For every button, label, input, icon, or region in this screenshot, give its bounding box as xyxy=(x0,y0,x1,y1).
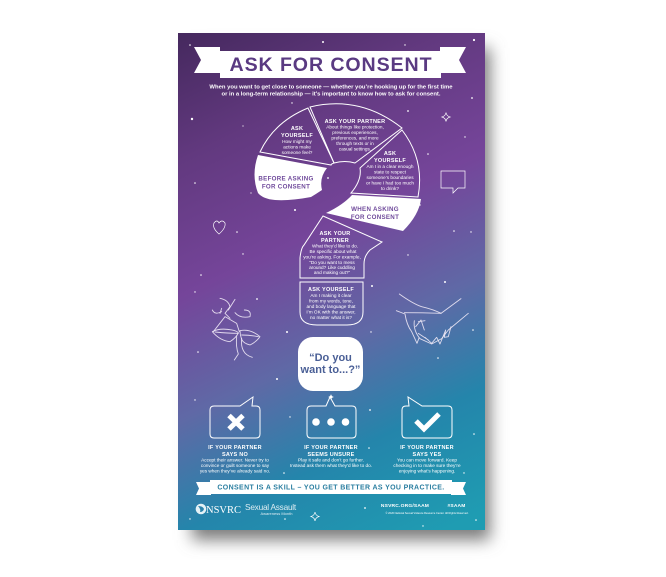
segment: ask yourself, left: someone feel? xyxy=(282,150,313,155)
website and hashtag: NSVRC.ORG/SAAM xyxy=(381,503,429,509)
response: seems unsure: Instead ask them what they’d like to do. xyxy=(290,463,372,468)
segment: ask yourself, right: to drink? xyxy=(381,186,399,191)
response: says no xyxy=(200,397,270,474)
logo: NSVRC: NSVRC xyxy=(206,505,241,516)
segment: ask yourself, bottom: ASK YOURSELF xyxy=(308,287,354,293)
response: says yes: enjoying what’s happening. xyxy=(399,468,455,474)
segment: ask your partner: casual settings. xyxy=(339,146,371,152)
decorative stars xyxy=(189,39,477,527)
poster shadow xyxy=(192,48,490,540)
segment: ask your partner, lower: Be specific about what xyxy=(310,249,357,254)
question mark diagram xyxy=(254,104,421,325)
intro text: or in a long-term relationship — it’s important to know how to ask for consent. xyxy=(221,91,441,97)
footer banner xyxy=(196,480,466,495)
segment: ask yourself, left: How might my xyxy=(282,139,312,144)
footer banner: CONSENT IS A SKILL – YOU GET BETTER AS YOU PRACTICE. xyxy=(217,485,445,492)
segment: before asking: BEFORE ASKING xyxy=(258,176,314,182)
segment: ask yourself, right: YOURSELF xyxy=(374,158,406,164)
response: says yes: You can move forward. Keep xyxy=(397,458,457,462)
website and hashtag: #SAAM xyxy=(447,503,466,509)
response: seems unsure xyxy=(290,397,372,468)
response: says yes xyxy=(393,397,461,474)
sparkle centre xyxy=(328,394,334,400)
website and hashtag: © 2020 National Sexual Violence Resource Center. All Rights Reserved. xyxy=(386,511,469,515)
response: seems unsure: Play it safe and don’t go further. xyxy=(298,458,364,462)
icon: bubble with check xyxy=(402,397,452,438)
response: says yes: SAYS YES xyxy=(413,452,442,458)
segment: ask yourself, bottom xyxy=(300,282,363,325)
speech bubble: do you want to: “Do you xyxy=(309,352,352,364)
speech bubble: do you want to: want to...?” xyxy=(300,364,360,376)
segment: ask your partner, lower: ASK YOUR xyxy=(320,231,350,237)
segment: ask yourself, right: Am I in a clear enough xyxy=(367,164,414,169)
segment: ask yourself, right: ASK xyxy=(384,151,396,157)
response: seems unsure: SEEMS UNSURE xyxy=(307,452,355,458)
response: says no: convince or guilt someone to say xyxy=(201,463,270,468)
response: says no: Accept their answer. Never try to xyxy=(201,458,269,462)
response: says no: SAYS NO xyxy=(222,452,248,458)
segment: before asking xyxy=(254,155,327,200)
segment: ask yourself, bottom: from my words, tone, xyxy=(309,298,353,304)
logo: Sexual Assault Awareness Month: Awareness Month xyxy=(261,511,292,516)
segment: ask yourself, bottom: and body language that xyxy=(306,304,356,309)
segment: ask your partner, lower: you’re asking. For example, xyxy=(303,254,361,260)
icon: kissing lips xyxy=(212,298,260,360)
segment: ask yourself, bottom: I’m OK with the answer, xyxy=(306,310,356,314)
segment: ask yourself, right xyxy=(351,130,420,197)
intro text xyxy=(209,84,453,97)
website and hashtag xyxy=(381,503,469,515)
response: says no: yes when they’ve already said no. xyxy=(200,468,270,474)
response: says no: IF YOUR PARTNER xyxy=(208,445,262,451)
segment: ask yourself, left: YOURSELF xyxy=(281,133,313,139)
segment: when asking xyxy=(326,195,421,231)
segment: before asking: FOR CONSENT xyxy=(262,184,310,190)
sparkle top right xyxy=(442,112,450,122)
segment: when asking: WHEN ASKING xyxy=(351,206,399,213)
logo: NSVRC xyxy=(196,504,241,516)
segment: ask yourself, right: state to respect xyxy=(374,170,407,174)
segment: ask your partner, lower: PARTNER xyxy=(321,238,349,244)
response: says yes: checking in to make sure they’re xyxy=(393,463,461,468)
poster background xyxy=(178,33,485,530)
segment: ask yourself, bottom: no matter what it is? xyxy=(310,315,352,320)
segment: when asking: FOR CONSENT xyxy=(351,214,399,221)
response: says yes: IF YOUR PARTNER xyxy=(400,445,454,451)
segment: ask your partner: About things like protection, xyxy=(326,124,384,130)
segment: ask your partner, lower: What they’d like to do. xyxy=(312,244,358,248)
segment: ask your partner, lower: and making out?” xyxy=(314,270,351,275)
segment: ask your partner, lower: “Do you want to mess xyxy=(309,260,355,265)
icon: bubble with dots xyxy=(307,397,356,438)
segment: ask your partner, lower xyxy=(300,216,382,278)
intro text: When you want to get close to someone — whether you’re hooking up for the first time xyxy=(209,84,453,90)
segment: ask your partner: through texts or in xyxy=(336,141,374,146)
icon: bubble with x xyxy=(210,397,260,438)
logo: Sexual Assault Awareness Month: Sexual Assault xyxy=(245,502,297,512)
icon: chat bubble xyxy=(441,171,465,193)
segment: ask yourself, left: ASK xyxy=(291,126,303,132)
segment: ask your partner, lower: around? Like cuddling xyxy=(309,265,355,270)
segment: ask your partner: preferences, and more xyxy=(331,136,379,140)
segment: ask yourself, left xyxy=(260,108,334,165)
segment: ask your partner xyxy=(310,104,402,163)
icon: heart xyxy=(214,221,225,234)
segment: ask your partner: previous experiences, xyxy=(332,130,378,135)
segment: ask yourself, left: actions make xyxy=(283,144,311,150)
response: seems unsure: IF YOUR PARTNER xyxy=(304,445,358,451)
icon: holding hands xyxy=(396,294,468,344)
title: ASK FOR CONSENT xyxy=(230,54,432,76)
segment: ask yourself, bottom: Am I making it clear xyxy=(310,293,352,298)
segment: ask yourself, right: someone’s boundaries xyxy=(366,175,414,180)
title banner xyxy=(194,47,466,78)
segment: ask yourself, right: or have I had too much xyxy=(366,180,414,186)
segment: ask your partner: ASK YOUR PARTNER xyxy=(325,119,385,125)
sparkle bottom xyxy=(311,512,319,521)
speech bubble: do you want to xyxy=(298,337,363,391)
